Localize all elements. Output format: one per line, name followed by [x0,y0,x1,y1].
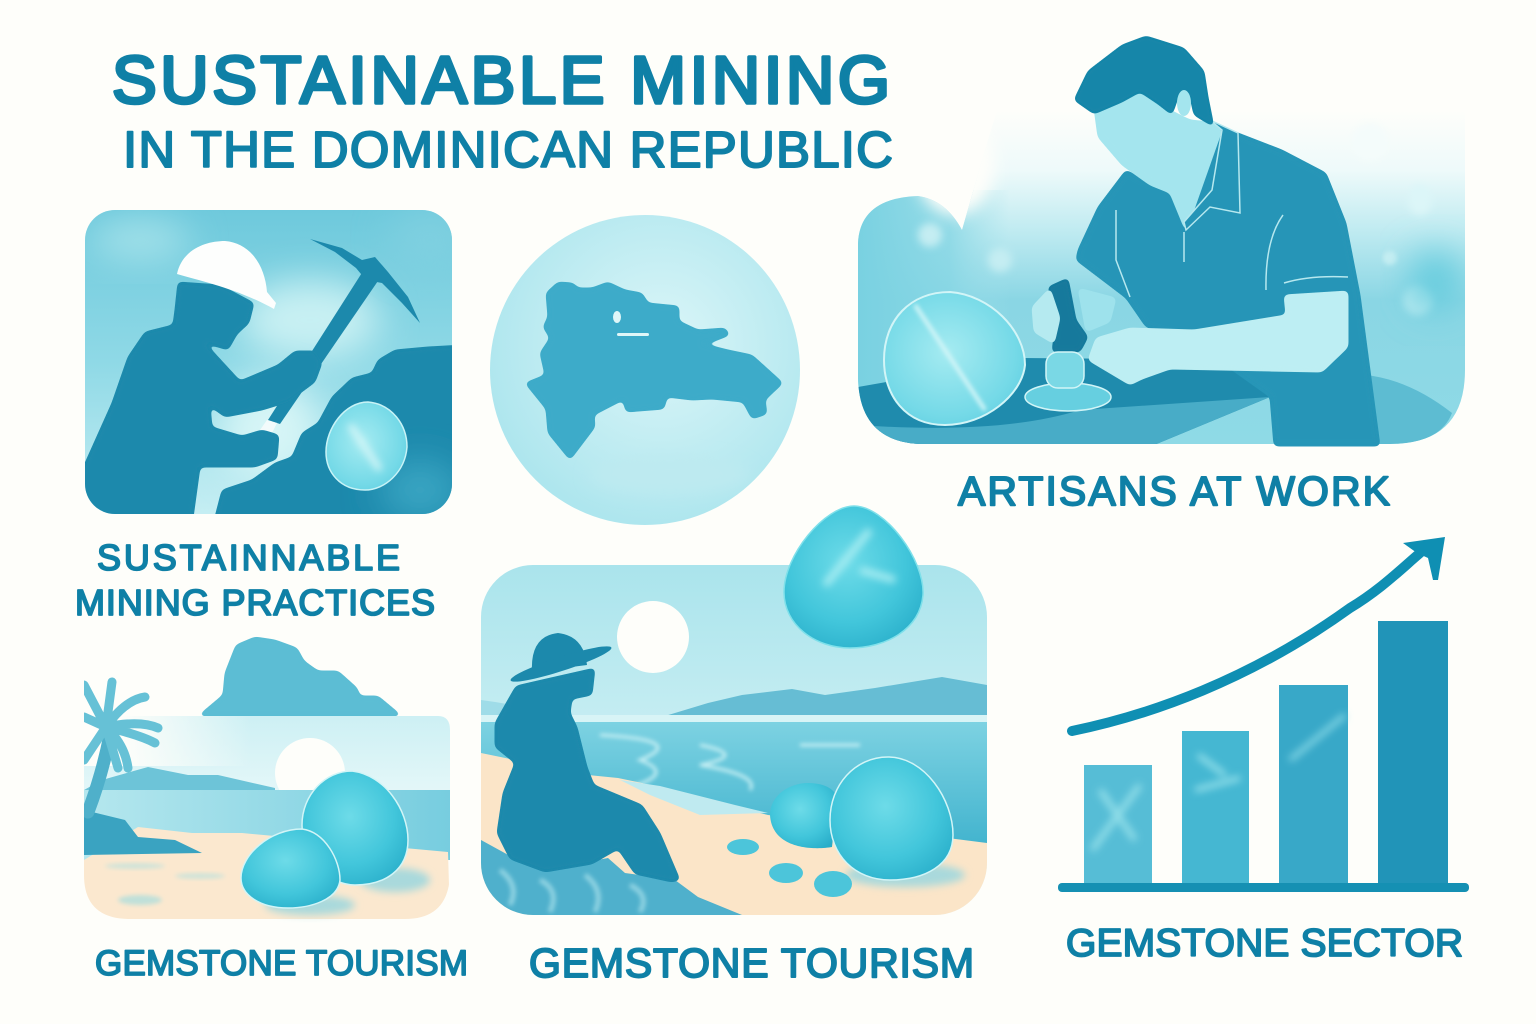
axis [1058,883,1469,892]
icon: beach gemstones [727,757,965,897]
woman silhouette [495,668,680,882]
icon: small stone on dish [1025,352,1111,411]
title [112,43,893,178]
hair [1074,36,1214,127]
label: sustainable mining practices: MINING PRACTICES [75,582,435,623]
artisan figure [1032,36,1380,446]
title: SUSTAINABLE MINING [112,43,890,118]
title: IN THE DOMINICAN REPUBLIC [123,121,893,178]
miner silhouette [82,282,322,525]
pickaxe [268,239,420,424]
chart: gemstone sector growth [1058,537,1469,892]
label: large gemstone tourism: GEMSTONE TOURISM [529,940,974,986]
shirt and body [1076,122,1380,446]
icon: gemstone in rock [326,402,407,490]
bar 3 [1279,685,1348,885]
arrow [1072,537,1445,731]
sun hat [508,633,614,687]
label: gemstone sector: GEMSTONE SECTOR [1066,922,1463,965]
grip [260,420,277,433]
panel: small gemstone tourism [84,637,450,919]
panel: large gemstone tourism [481,506,987,915]
label: small gemstone tourism: GEMSTONE TOURISM [95,944,468,983]
ear [1177,90,1191,116]
tool [1048,278,1088,352]
icon: gemstones [241,771,430,915]
panel: map circle [490,215,800,525]
map of the Dominican Republic [525,282,783,460]
forearm behind [1078,288,1116,332]
cloud island [198,637,402,716]
panel: artisans at work [858,36,1468,450]
icon: floating gemstone [784,506,923,648]
hard hat [177,241,276,309]
icon: large gemstone [884,292,1025,425]
rock pile [215,345,452,514]
shirt seams [1116,210,1348,297]
label: artisans at work: ARTISANS AT WORK [958,468,1390,514]
icon: palm tree [84,682,158,812]
neck and face [1094,88,1222,232]
table [858,358,1270,450]
arm and hand [1088,291,1348,385]
bar 1 [1084,765,1152,885]
label: sustainable mining practices [75,537,435,623]
bar 2 [1182,731,1249,885]
collar [1184,120,1240,230]
left hand [1032,288,1060,344]
label: sustainable mining practices: SUSTAINNABLE [97,537,400,578]
bar 4 [1378,621,1448,885]
panel: sustainable mining practices [82,210,470,525]
